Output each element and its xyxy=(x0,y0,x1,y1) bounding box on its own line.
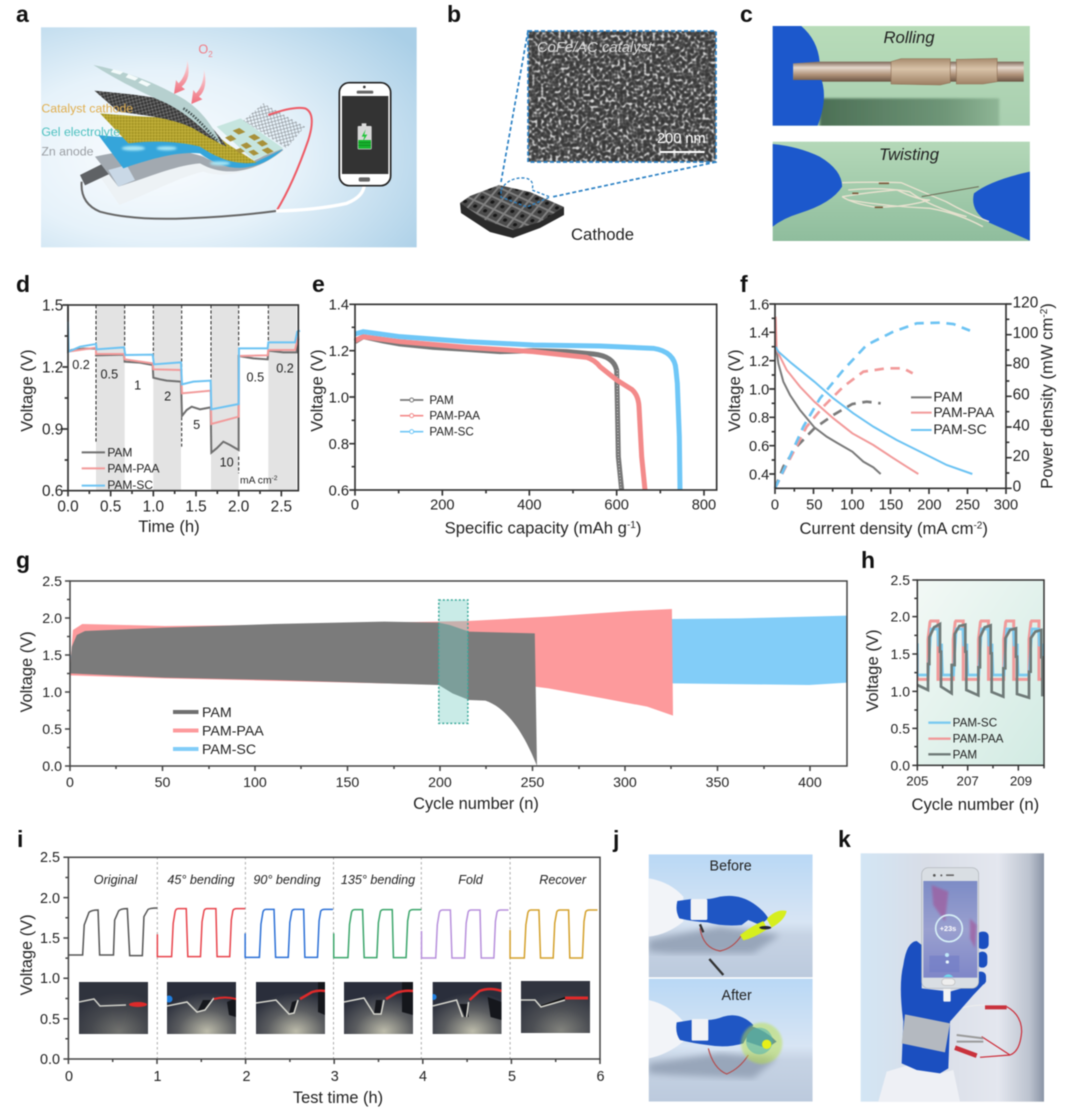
x axis title: ) xyxy=(636,518,641,537)
x tick labels xyxy=(65,1069,605,1085)
x tick labels xyxy=(57,498,292,515)
panel label k: k xyxy=(838,826,851,852)
panel e: discharge capacity chart xyxy=(308,298,717,537)
panel d: rate performance chart xyxy=(17,298,300,536)
legend: PAM-SC xyxy=(107,478,153,492)
current density labels: 1 xyxy=(134,378,141,392)
left tick labels: 1.2 xyxy=(749,354,769,370)
y tick labels: 0.5 xyxy=(40,1012,60,1028)
y tick labels: 0.6 xyxy=(42,483,63,500)
current density labels: -2 xyxy=(272,475,278,482)
icon: smartphone with battery xyxy=(339,83,391,186)
axes xyxy=(63,857,600,1064)
power density dashed curves xyxy=(775,323,970,488)
shaded current steps xyxy=(96,305,297,491)
photo: rolling xyxy=(773,26,1030,132)
axes xyxy=(65,581,847,771)
label rolling: Rolling xyxy=(883,28,935,47)
band PAM-PAA xyxy=(70,609,673,716)
y tick labels: 1.5 xyxy=(40,931,60,947)
legend xyxy=(82,445,160,492)
current density labels: 0.2 xyxy=(72,358,90,372)
left axis title: Voltage (V) xyxy=(725,349,744,432)
x tick labels: 0 xyxy=(65,1069,73,1085)
y tick labels: 1.0 xyxy=(891,683,910,699)
y tick labels xyxy=(42,574,62,775)
x tick labels: 207 xyxy=(957,773,979,788)
y tick labels: 1.0 xyxy=(42,685,62,701)
legend: PAM xyxy=(202,705,232,721)
x axis title: Specific capacity (mAh g xyxy=(445,518,627,537)
current density labels: 2 xyxy=(164,389,171,403)
thumbnail: original xyxy=(79,982,148,1034)
y tick labels: 2.5 xyxy=(40,850,60,866)
curve PAM-PAA xyxy=(68,337,298,424)
legend: PAM-PAA xyxy=(429,410,480,423)
label before: Before xyxy=(710,859,752,875)
legend: PAM xyxy=(953,748,977,761)
label gel electrolyte: Gel electrolyte xyxy=(41,125,120,139)
y tick labels xyxy=(329,298,349,499)
condition labels: Fold xyxy=(458,873,484,887)
red wire xyxy=(268,108,312,211)
label CoFe/AC catalyst: CoFe/AC catalyst xyxy=(537,40,653,56)
panel label b: b xyxy=(447,1,461,27)
photo: after xyxy=(649,979,813,1102)
panel j: fan demonstration photos xyxy=(649,854,813,1102)
charging text: +23s xyxy=(940,924,956,933)
icon: woven cathode xyxy=(460,178,564,238)
condition labels: Recover xyxy=(539,873,587,887)
right axis title: ) xyxy=(1037,303,1056,309)
panel label d: d xyxy=(16,271,30,297)
legend xyxy=(400,394,480,439)
curve recover xyxy=(510,910,597,958)
panel label i: i xyxy=(17,826,23,852)
y tick labels: 0.0 xyxy=(40,1052,60,1068)
y tick labels: 2.0 xyxy=(42,611,62,627)
panel b: cathode and SEM image xyxy=(460,31,716,244)
sleeve xyxy=(878,1066,960,1102)
right tick labels: 80 xyxy=(1013,356,1030,373)
legend: PAM-SC xyxy=(953,717,997,730)
thumbnail: 90 degree bending xyxy=(256,982,325,1034)
catalyst layer xyxy=(100,113,257,163)
legend: PAM xyxy=(429,394,454,407)
legend xyxy=(928,717,1004,761)
x axis title: -2 xyxy=(973,521,983,532)
curve PAM-PAA xyxy=(355,337,645,490)
x tick labels xyxy=(351,498,716,514)
thumbnail: fold xyxy=(431,982,502,1034)
y tick labels: 2.5 xyxy=(891,572,910,588)
x tick labels xyxy=(66,775,822,791)
y tick labels: 1.5 xyxy=(42,298,63,315)
y tick labels: 0.8 xyxy=(329,437,349,453)
panel label f: f xyxy=(740,271,748,297)
label O2: 2 xyxy=(208,50,213,59)
legend: PAM-PAA xyxy=(107,461,160,475)
legend xyxy=(911,388,995,437)
x tick labels: 300 xyxy=(613,775,637,791)
panel c: flexibility photos xyxy=(773,26,1030,241)
y tick labels: 2.0 xyxy=(40,891,60,907)
label twisting: Twisting xyxy=(879,145,940,164)
y tick labels: 1.2 xyxy=(329,344,349,360)
x tick labels: 1.0 xyxy=(143,498,164,515)
panel a: battery schematic xyxy=(41,27,417,247)
y tick labels: 0.5 xyxy=(891,720,910,736)
panel label a: a xyxy=(16,1,29,27)
x tick labels: 50 xyxy=(806,497,822,513)
condition labels xyxy=(94,873,587,887)
left tick labels: 0.6 xyxy=(749,439,769,455)
y tick labels: 1.4 xyxy=(329,298,349,314)
current density labels: 5 xyxy=(193,418,200,432)
schematic background xyxy=(41,27,417,247)
y tick labels: 0.6 xyxy=(329,483,349,499)
band PAM xyxy=(70,622,537,766)
axes xyxy=(62,305,298,496)
x tick labels: 250 xyxy=(521,775,544,791)
right tick labels: 40 xyxy=(1013,417,1030,434)
plot background xyxy=(917,580,1044,765)
axes xyxy=(769,304,1012,494)
x tick labels: 50 xyxy=(155,775,170,791)
x tick labels: 5 xyxy=(508,1069,516,1085)
current density labels: 0.5 xyxy=(247,371,264,385)
y tick labels: 0.9 xyxy=(42,422,63,439)
y axis title: Voltage (V) xyxy=(863,629,882,712)
curve PAM-SC xyxy=(68,322,300,409)
x tick labels: 205 xyxy=(906,773,928,788)
x tick labels: 150 xyxy=(336,775,359,791)
right tick labels: 0 xyxy=(1013,479,1021,496)
x axis title: Cycle number (n) xyxy=(911,795,1039,814)
panel label e: e xyxy=(312,271,325,297)
y tick labels: 1.2 xyxy=(42,360,63,377)
thumbnail: 45 degree bending xyxy=(166,982,236,1034)
smartphone xyxy=(922,868,979,988)
bottom substrate sheet xyxy=(100,147,283,205)
white USB cable xyxy=(276,185,364,211)
x tick labels: 400 xyxy=(798,775,822,791)
right tick labels: 20 xyxy=(1013,448,1030,465)
wire mesh current collector xyxy=(243,103,305,148)
y tick labels: 1.5 xyxy=(891,646,910,662)
y axis title: Voltage (V) xyxy=(17,349,36,432)
polarization solid curves xyxy=(775,317,972,474)
x tick labels: 4 xyxy=(419,1069,427,1085)
legend: PAM-PAA xyxy=(202,724,264,740)
x tick labels: 800 xyxy=(692,498,716,514)
right tick labels: 100 xyxy=(1013,325,1038,342)
y tick labels: 0.5 xyxy=(42,722,62,738)
condition labels: 135° bending xyxy=(341,873,415,887)
x tick labels: 2.5 xyxy=(271,498,292,515)
curve original xyxy=(68,908,157,956)
left tick labels: 1.0 xyxy=(749,382,769,398)
highlight box xyxy=(439,600,468,723)
y tick labels: 1.0 xyxy=(40,971,60,987)
x tick labels: 200 xyxy=(430,498,455,514)
x tick labels: 2.0 xyxy=(228,498,249,515)
x tick labels: 1.5 xyxy=(185,498,207,515)
legend: PAM xyxy=(107,445,132,459)
curve PAM xyxy=(355,337,622,490)
panel label g: g xyxy=(16,547,30,573)
y axis title: Voltage (V) xyxy=(308,349,327,432)
x tick labels: 300 xyxy=(994,497,1018,513)
condition labels: 45° bending xyxy=(167,873,235,887)
current density labels: 0.5 xyxy=(101,368,118,382)
legend: PAM-SC xyxy=(933,421,987,437)
label after: After xyxy=(722,988,752,1004)
y axis title: Voltage (V) xyxy=(18,631,36,713)
panel i: bending stability chart xyxy=(18,850,605,1107)
transparent sheet with catalyst squares xyxy=(217,118,283,160)
current density labels xyxy=(72,358,294,486)
x axis title: Cycle number (n) xyxy=(413,795,539,813)
panel k: phone charging photo xyxy=(861,853,1044,1102)
curve 90 degree bending xyxy=(245,909,333,957)
legend: PAM-SC xyxy=(202,742,256,758)
legend: PAM-PAA xyxy=(933,404,995,420)
photo background xyxy=(861,853,1044,1102)
y tick labels xyxy=(42,298,63,500)
curve 135 degree bending xyxy=(334,910,422,958)
voltage curves xyxy=(68,908,597,958)
curve PAM xyxy=(68,307,298,453)
panel h: zoomed cycling chart xyxy=(863,572,1044,814)
section dividers xyxy=(157,857,510,1059)
curves xyxy=(917,621,1044,698)
x tick labels xyxy=(906,773,1032,788)
current density labels: mA cm xyxy=(240,475,272,486)
legend: PAM-SC xyxy=(429,426,474,439)
x tick labels: 0 xyxy=(351,498,359,514)
x tick labels: 0.5 xyxy=(100,498,121,515)
zinc anode layer xyxy=(80,147,283,187)
x tick labels xyxy=(771,497,1018,513)
band PAM-SC xyxy=(70,616,847,685)
axes xyxy=(912,580,1044,771)
legend: PAM-PAA xyxy=(953,733,1004,746)
y tick labels: 0.0 xyxy=(891,757,910,773)
y tick labels: 1.0 xyxy=(329,390,349,406)
top sheet layer xyxy=(93,65,222,145)
panel label c: c xyxy=(740,1,753,27)
USB plug xyxy=(943,988,951,1002)
label cathode: Cathode xyxy=(571,225,634,244)
phone screen xyxy=(923,881,977,978)
x axis title: -1 xyxy=(627,520,636,531)
label Zn anode: Zn anode xyxy=(41,144,94,158)
y tick labels xyxy=(40,850,60,1068)
arrows: oxygen flow xyxy=(174,60,205,104)
x axis title: Current density (mA cm xyxy=(799,519,973,538)
x tick labels: 2 xyxy=(242,1069,251,1085)
cycling bands xyxy=(70,600,847,766)
x tick labels: 3 xyxy=(331,1069,339,1085)
legend xyxy=(173,705,264,758)
x tick labels: 250 xyxy=(955,497,980,513)
x tick labels: 200 xyxy=(428,775,452,791)
x tick labels: 350 xyxy=(706,775,729,791)
x tick labels: 600 xyxy=(604,498,629,514)
current density labels: 0.2 xyxy=(276,361,294,375)
photo: before xyxy=(649,854,813,977)
x tick labels: 200 xyxy=(917,497,942,513)
y tick labels: 2.5 xyxy=(42,574,62,590)
panel g: long-term cycling chart xyxy=(18,574,847,813)
x tick labels: 0.0 xyxy=(57,498,79,515)
curve 45 degree bending xyxy=(157,909,245,957)
gel electrolyte layer xyxy=(98,135,283,168)
panel label h: h xyxy=(861,547,875,573)
SEM micrograph xyxy=(528,31,716,162)
battery patch xyxy=(902,1014,950,1052)
x tick labels: 1 xyxy=(153,1069,162,1085)
y tick labels: 0.0 xyxy=(42,759,62,775)
x axis title: ) xyxy=(982,519,988,538)
zoom frame and guides xyxy=(501,31,716,197)
x tick labels: 400 xyxy=(517,498,542,514)
y tick labels: 1.5 xyxy=(42,648,62,664)
x tick labels: 0 xyxy=(771,497,779,513)
y axis title: Voltage (V) xyxy=(18,914,36,996)
x tick labels: 100 xyxy=(840,497,865,513)
x axis title: Test time (h) xyxy=(293,1089,383,1107)
thumbnail: recover xyxy=(521,981,590,1033)
right axis title: -2 xyxy=(1039,308,1050,318)
panel f: polarization and power density chart xyxy=(725,294,1056,538)
left tick labels: 0.8 xyxy=(749,411,769,427)
left tick labels: 1.6 xyxy=(749,297,769,313)
legend: PAM xyxy=(933,388,963,404)
x tick labels: 6 xyxy=(596,1069,605,1085)
x tick labels: 209 xyxy=(1010,773,1032,788)
condition labels: 90° bending xyxy=(253,873,321,887)
blue glove xyxy=(901,932,989,1073)
grey wire xyxy=(82,182,276,219)
x tick labels: 150 xyxy=(879,497,903,513)
curve PAM-SC xyxy=(355,332,680,490)
x axis title: Time (h) xyxy=(138,517,200,536)
axes xyxy=(349,304,717,496)
right axis title: Power density (mW cm xyxy=(1037,318,1056,489)
x tick labels: 100 xyxy=(243,775,267,791)
right tick labels xyxy=(1013,294,1038,496)
x tick labels: 0 xyxy=(66,775,74,791)
label catalyst cathode: Catalyst cathode xyxy=(41,102,133,116)
carbon mesh layer xyxy=(94,91,227,147)
thumbnail: 135 degree bending xyxy=(344,982,413,1034)
current density labels: 10 xyxy=(220,456,234,470)
y tick labels xyxy=(891,572,910,773)
curve fold xyxy=(422,910,508,958)
left tick labels: 0.4 xyxy=(749,467,769,483)
left tick labels: 1.4 xyxy=(749,326,769,342)
label O2: O xyxy=(198,42,208,56)
scale bar 200 nm: 200 nm xyxy=(657,131,706,147)
left tick labels xyxy=(749,297,769,483)
panel label j: j xyxy=(612,826,619,852)
right tick labels: 120 xyxy=(1013,294,1038,311)
photo: twisting xyxy=(773,142,1030,241)
wires and clips xyxy=(948,1005,1022,1057)
y tick labels: 2.0 xyxy=(891,609,910,625)
condition labels: Original xyxy=(94,873,138,887)
right tick labels: 60 xyxy=(1013,387,1030,404)
